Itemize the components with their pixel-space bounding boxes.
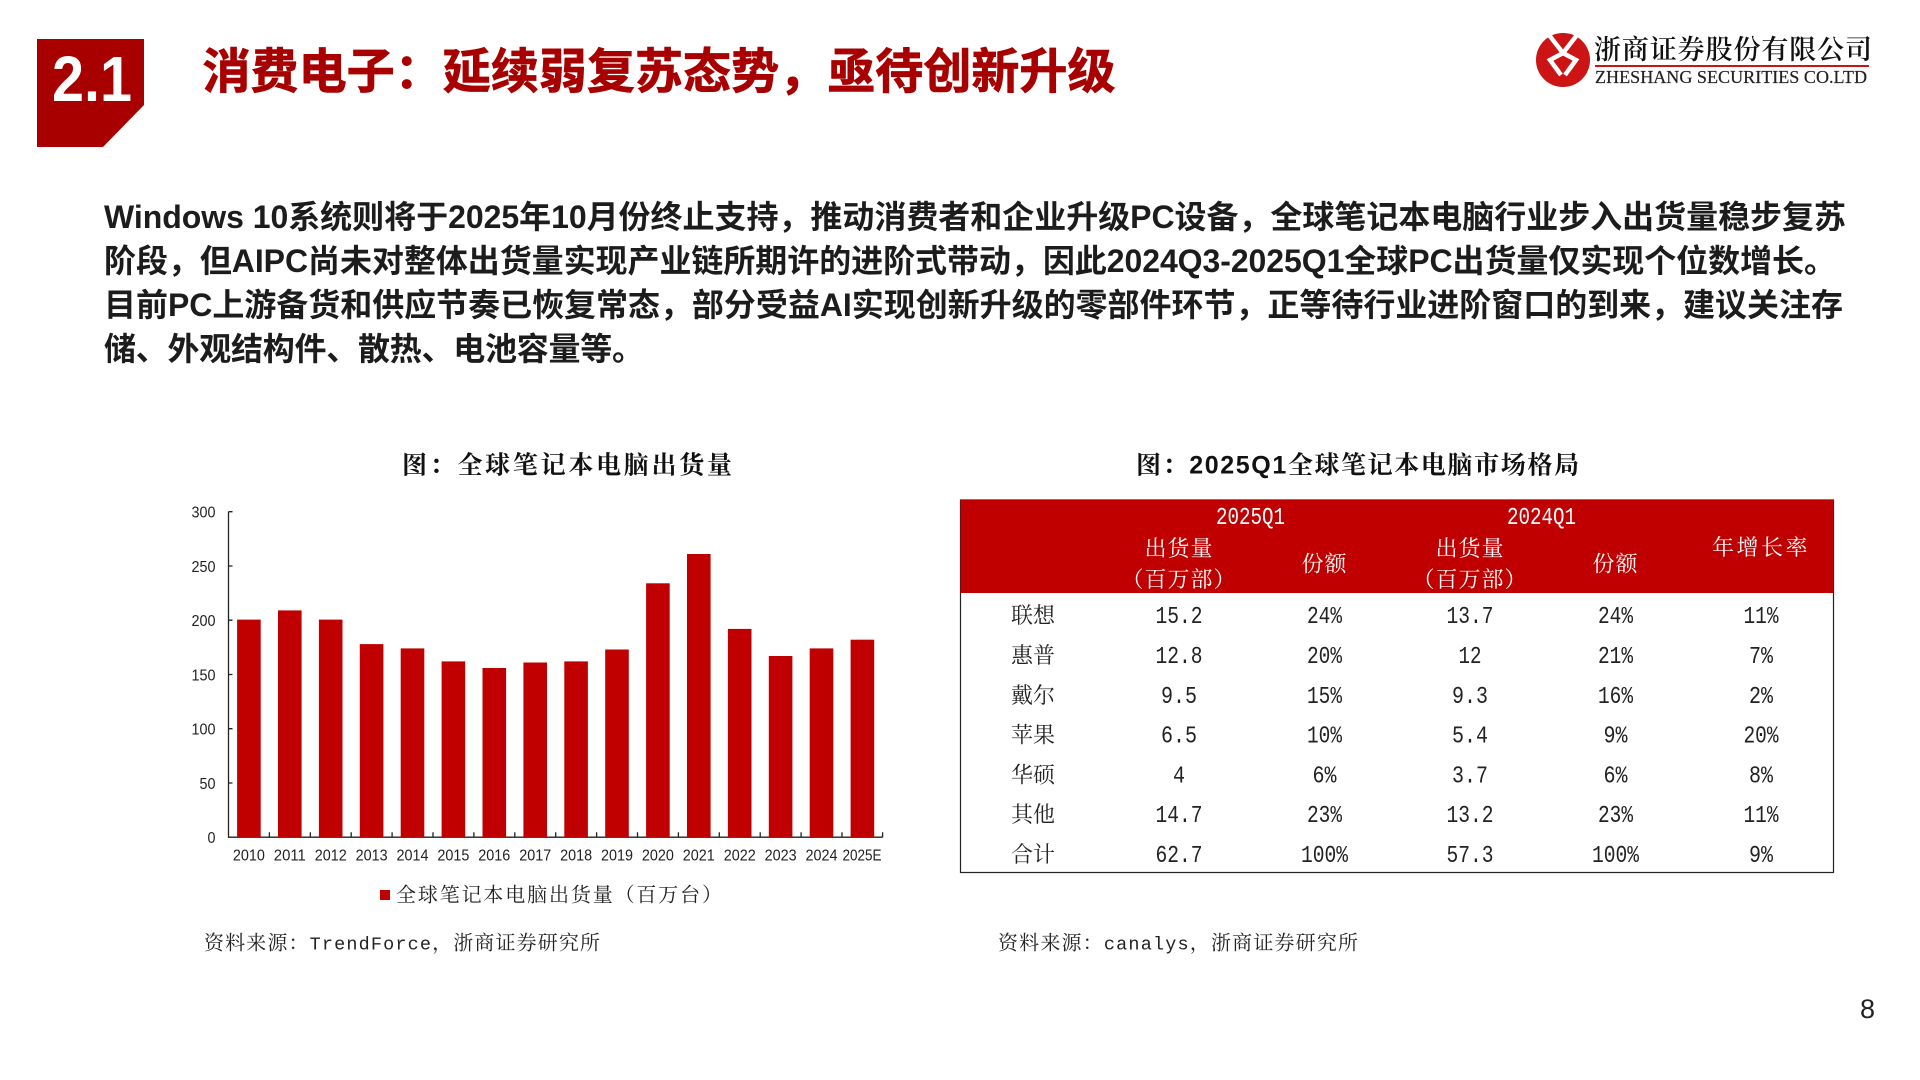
table row: 华硕 [1011,762,1773,790]
left chart heading: 图：全球笔记本电脑出货量 [402,452,732,480]
x axis labels: 2014 [396,848,429,864]
body text block: Windows 10系统则将于2025年10月份终止支持，推动消费者和企业升级PC设备，全球笔记本电脑行业步入出货量稳步复苏 [104,199,1846,235]
table row: 苹果: 5.4 [1452,724,1488,750]
bars [237,554,874,837]
table row: 华硕: 3.7 [1452,764,1488,790]
table row: 合计: 9% [1749,843,1773,870]
icon: logo emblem [1536,33,1590,87]
table frame [960,500,1834,872]
table row: 华硕: 华硕 [1011,762,1056,788]
y axis labels: 100 [192,722,216,738]
table row: 惠普: 12 [1458,644,1482,671]
table row: 戴尔: 9.3 [1452,684,1488,711]
table header: 年增长率 [1712,535,1810,560]
logo english name: ZHESHANG SECURITIES CO.LTD [1595,67,1867,87]
table row: 合计: 62.7 [1156,843,1202,870]
x axis labels: 2016 [478,848,510,864]
table row: 合计 [1011,842,1773,870]
table row: 其他: 其他 [1011,802,1055,827]
table row: 其他: 14.7 [1156,803,1202,830]
x axis labels: 2012 [315,848,347,864]
table row: 苹果 [1011,722,1779,750]
table header: 2024Q1 [1507,505,1576,532]
page number: 8 [1860,994,1875,1024]
table header [960,500,1834,593]
x axis labels: 2010 [233,848,265,864]
table row: 联想: 15.2 [1156,604,1202,631]
y axis labels: 200 [192,613,216,630]
table row: 苹果: 6.5 [1161,724,1197,750]
table header: （百万部） [1412,567,1528,592]
table row: 戴尔: 9.5 [1161,684,1197,711]
table row: 华硕: 6% [1312,764,1337,790]
table row: 联想: 13.7 [1446,604,1494,631]
table header: 份额 [1301,552,1348,576]
y axis labels [192,504,216,847]
table row: 其他: 11% [1744,803,1779,830]
bar chart: global notebook shipments [192,504,883,906]
table row: 苹果: 苹果 [1011,722,1055,748]
table row: 惠普: 12.8 [1156,644,1202,671]
table header: 出货量 [1144,536,1214,561]
table row: 惠普 [1011,643,1773,671]
body text block: 目前PC上游备货和供应节奏已恢复常态，部分受益AI实现创新升级的零部件环节，正等待行业进阶窗口的到来，建议关注存 [104,287,1843,323]
y axis labels: 250 [192,559,216,576]
body text block [104,199,1846,367]
table row: 苹果: 20% [1744,724,1779,750]
x axis labels: 2018 [560,848,592,864]
x axis labels: 2023 [765,848,797,864]
legend: 全球笔记本电脑出货量（百万台） [396,884,722,906]
y axis labels: 150 [192,667,216,684]
y axis labels: 50 [200,776,216,793]
x axis labels: 2024 [806,848,838,864]
table row: 戴尔: 2% [1749,684,1773,711]
section badge: 2.1 [37,39,144,147]
table: 2025Q1 notebook market share [960,500,1834,872]
table row: 其他: 23% [1598,803,1633,830]
x axis labels: 2011 [274,848,306,864]
x axis labels: 2015 [437,848,469,864]
table row: 联想 [1011,603,1779,631]
table header: （百万部） [1121,567,1237,592]
body text block: 储、外观结构件、散热、电池容量等。 [104,331,644,367]
table row: 其他 [1011,802,1779,830]
x axis labels [233,848,881,864]
table row: 戴尔 [1011,683,1773,711]
table row: 联想: 24% [1307,604,1342,631]
x axis labels: 2013 [356,848,388,864]
y axis labels: 300 [192,504,216,522]
table row: 戴尔: 戴尔 [1011,683,1055,708]
axes [228,512,883,837]
title: 消费电子：延续弱复苏态势，亟待创新升级 [202,46,1116,99]
table row: 联想: 联想 [1011,603,1056,628]
body text block: 阶段，但AIPC尚未对整体出货量实现产业链所期许的进阶式带动，因此2024Q3-2025Q1全球PC出货量仅实现个位数增长。 [104,243,1836,279]
x axis labels: 2020 [642,848,674,864]
table header: 出货量 [1435,536,1505,561]
table row: 合计: 合计 [1011,842,1055,867]
x axis labels: 2021 [683,848,715,864]
table header: 份额 [1592,552,1639,576]
table row: 联想: 24% [1598,604,1633,631]
table row: 惠普: 惠普 [1011,643,1055,668]
table header: 2025Q1 [1216,505,1285,532]
table row: 合计: 100% [1301,843,1348,870]
x axis labels: 2025E [842,848,882,864]
y axis labels: 0 [208,830,216,847]
logo name: 浙商证券股份有限公司 [1594,35,1872,65]
table row: 惠普: 21% [1598,644,1633,671]
table row: 其他: 13.2 [1446,803,1494,830]
table row: 苹果: 9% [1604,724,1628,750]
table row: 合计: 100% [1592,843,1639,870]
x axis labels: 2019 [601,848,633,864]
table row: 其他: 23% [1307,803,1342,830]
table row: 华硕: 8% [1749,764,1773,790]
logo: Zheshang Securities [1536,33,1872,87]
table row: 合计: 57.3 [1446,843,1494,870]
right source note: 资料来源：canalys，浙商证券研究所 [998,932,1358,956]
left source note: 资料来源：TrendForce，浙商证券研究所 [204,932,600,956]
table row: 联想: 11% [1744,604,1779,631]
table row: 华硕: 6% [1604,764,1628,790]
table row: 戴尔: 15% [1307,684,1342,711]
table row: 华硕: 4 [1173,764,1185,790]
table row: 惠普: 20% [1307,644,1342,671]
table row: 惠普: 7% [1749,644,1773,671]
table row: 戴尔: 16% [1598,684,1633,711]
right table heading: 图：2025Q1全球笔记本电脑市场格局 [1136,450,1579,480]
x axis labels: 2017 [519,848,551,864]
section badge: 2.1: 2.1 [52,43,132,115]
table row: 苹果: 10% [1307,724,1342,750]
x axis labels: 2022 [724,848,756,864]
